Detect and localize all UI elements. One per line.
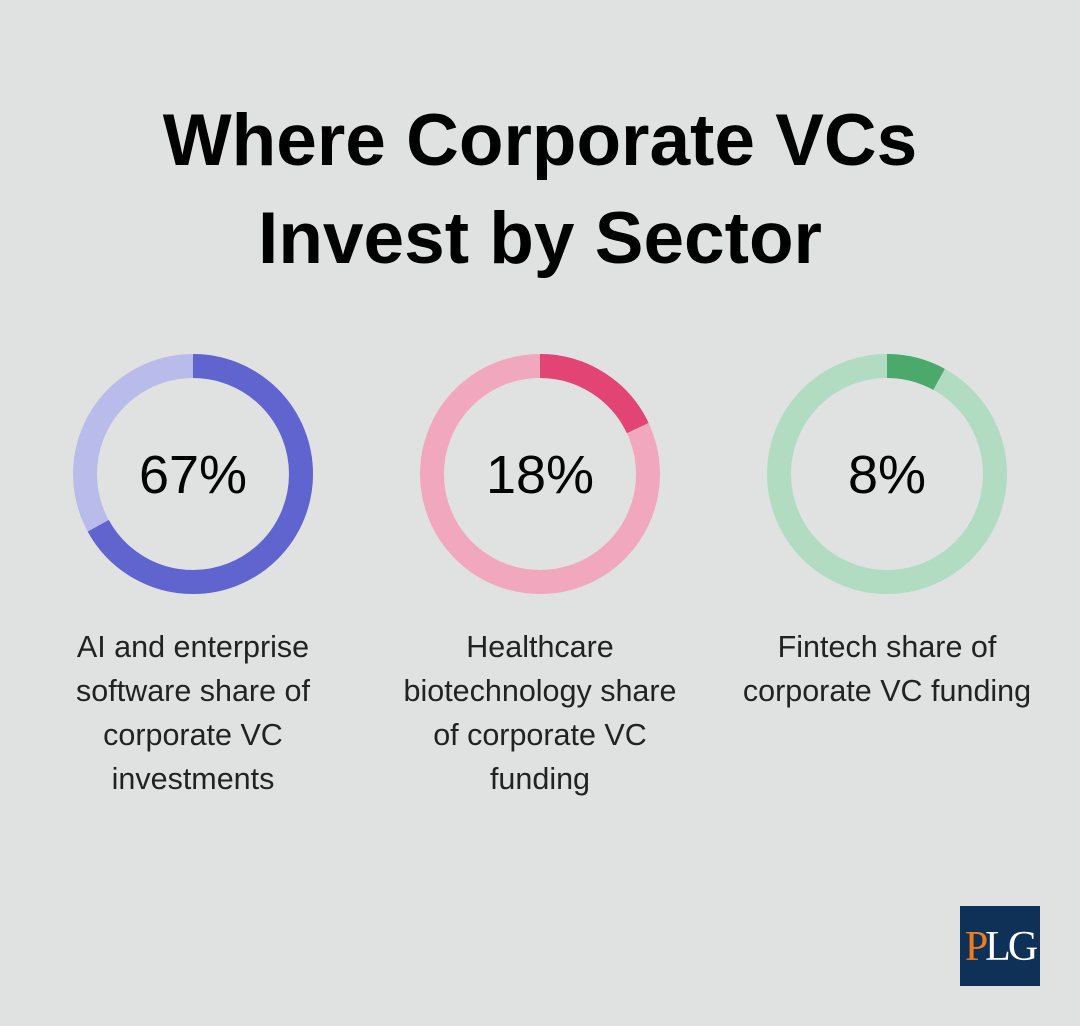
donut: 8%: 8%	[848, 445, 926, 505]
label: healthcare: biotechnology share	[404, 674, 676, 708]
donut: 67%	[85, 366, 301, 582]
donut: 67%: 67%	[139, 445, 247, 505]
label: healthcare: Healthcare	[466, 630, 614, 664]
label: AI	[76, 630, 310, 796]
label: AI: investments	[112, 762, 274, 796]
donut: 18%: 18%	[486, 445, 594, 505]
donut: 8%	[779, 366, 995, 582]
title: Invest by Sector	[258, 198, 822, 279]
label: AI: AI and enterprise	[77, 630, 309, 664]
label: healthcare	[404, 630, 676, 796]
label: fintech: corporate VC funding	[743, 674, 1031, 708]
label: AI: software share of	[76, 674, 310, 708]
donut: 18%	[432, 366, 648, 582]
label: healthcare: funding	[490, 762, 590, 796]
title	[162, 100, 917, 279]
title: Where Corporate VCs	[163, 100, 917, 181]
label: fintech	[743, 630, 1031, 708]
logo: PLG: PLG	[965, 924, 1035, 970]
logo: PLG	[960, 906, 1040, 986]
label: healthcare: of corporate VC	[433, 718, 647, 752]
label: fintech: Fintech share of	[778, 630, 996, 664]
label: AI: corporate VC	[103, 718, 283, 752]
